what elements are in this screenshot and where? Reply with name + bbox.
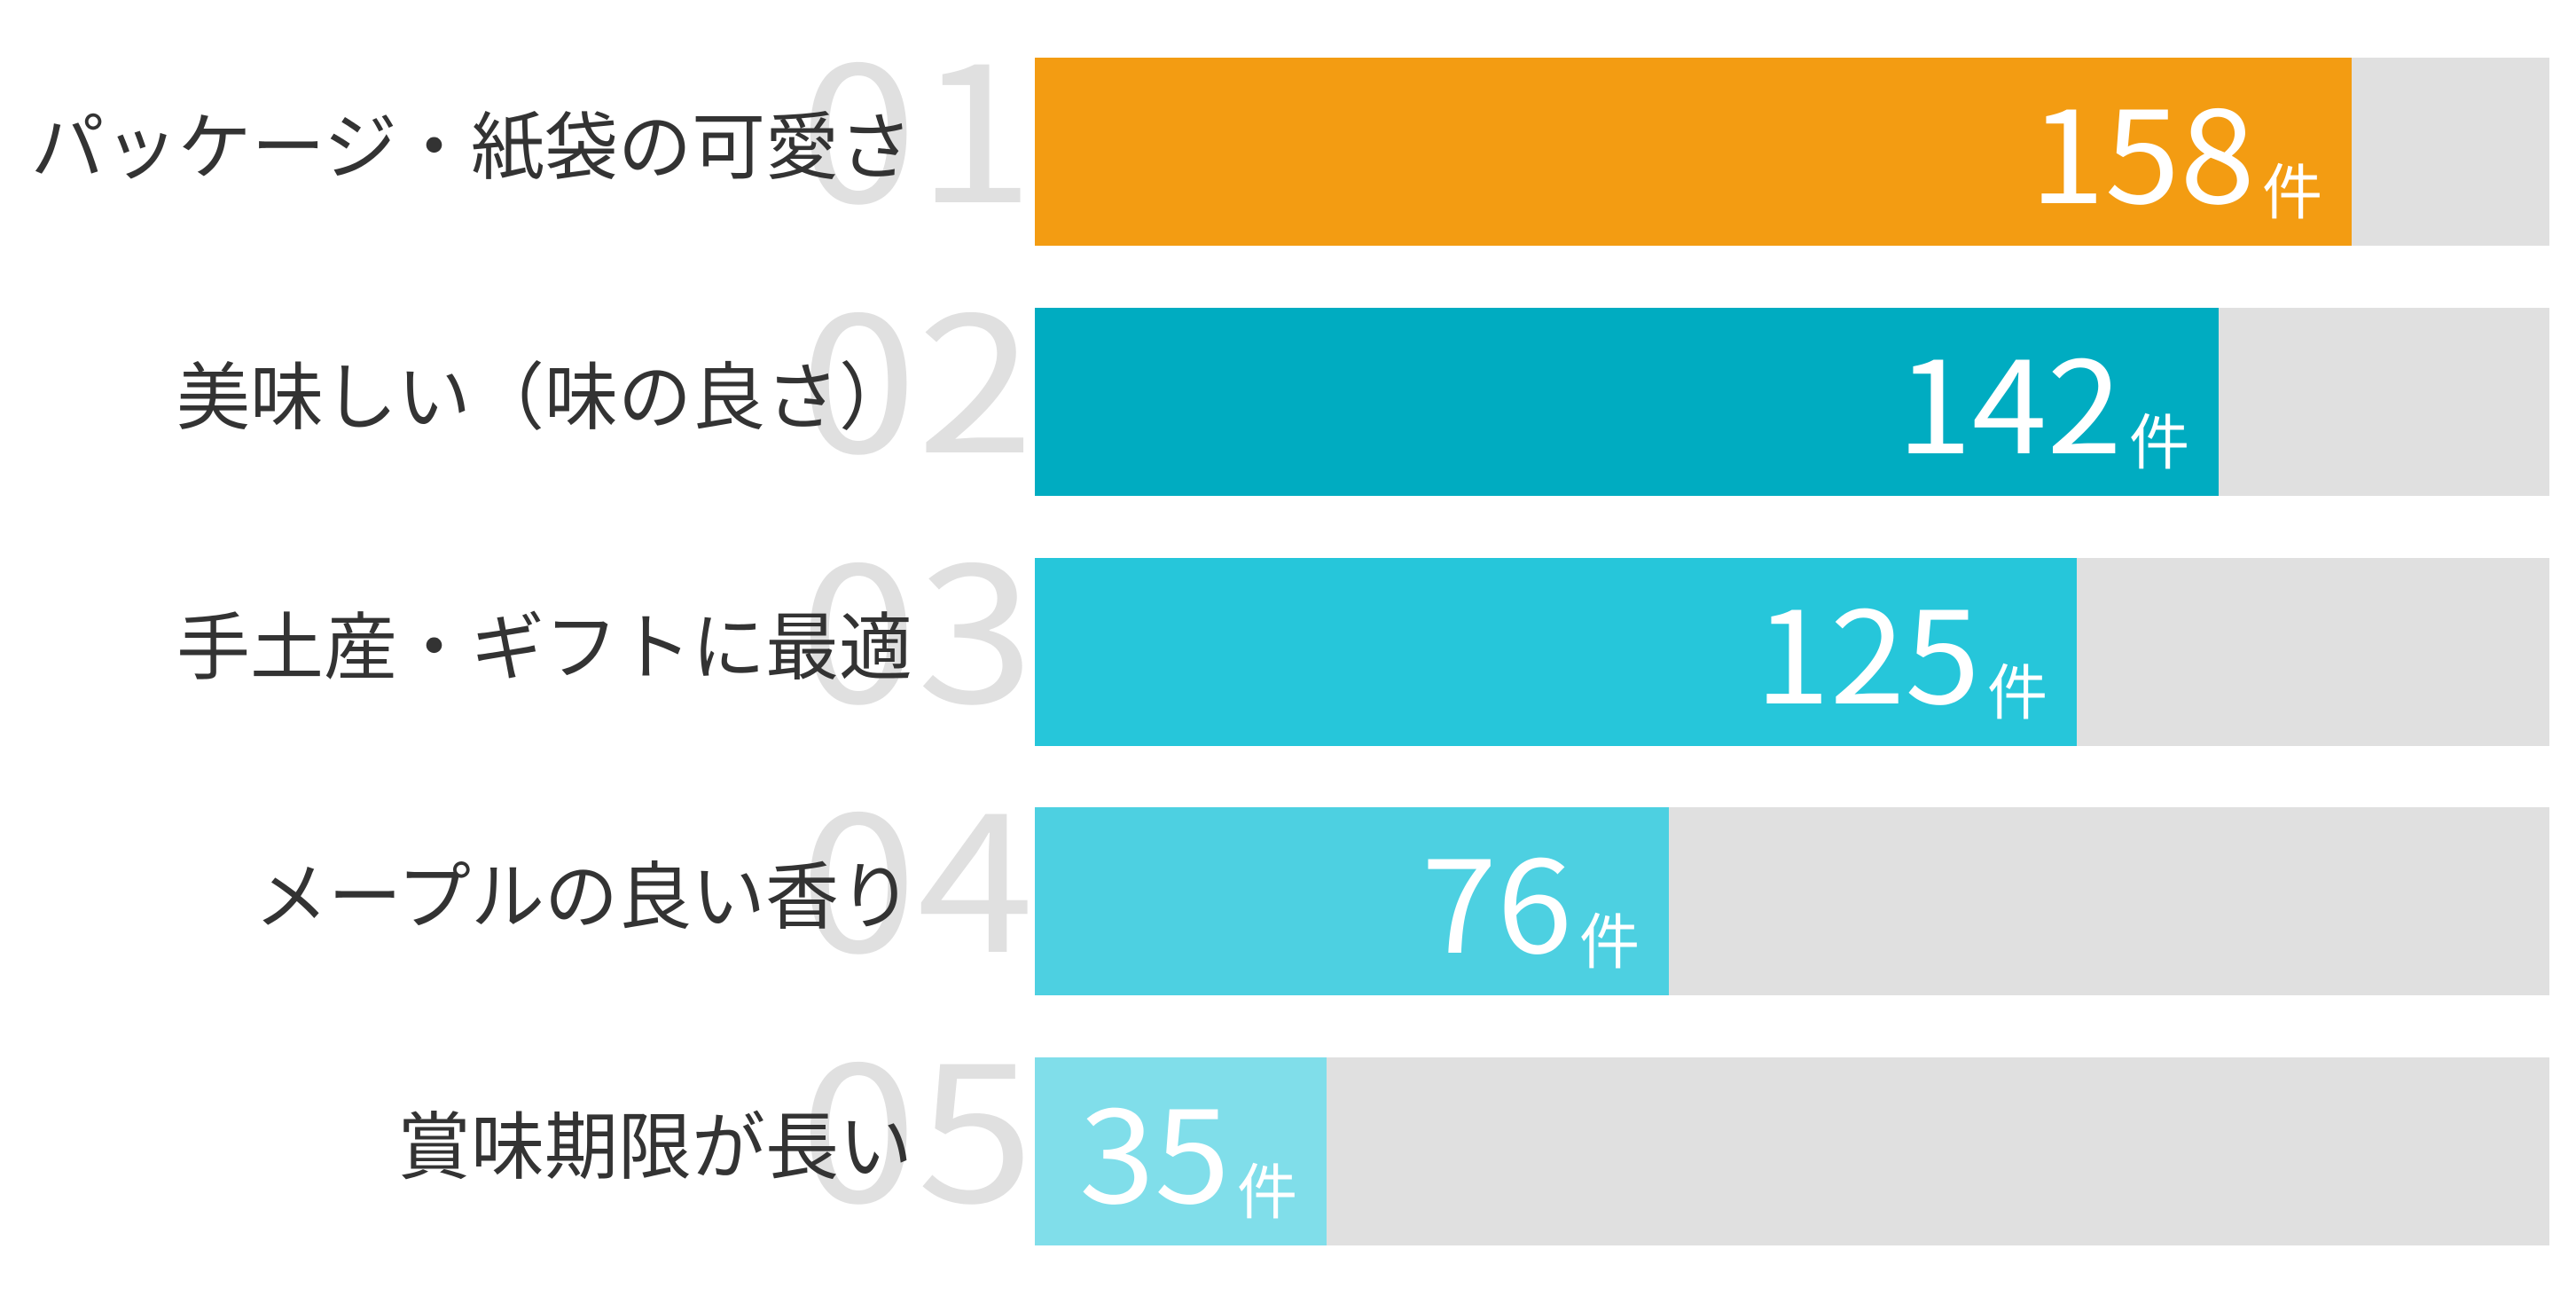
value 35: 35	[1079, 1056, 1230, 1240]
label: 賞味期限が長い	[397, 1106, 912, 1189]
unit: 件	[1579, 893, 1640, 981]
row 4: aroma	[254, 734, 2549, 1007]
label: 手土産・ギフトに最適	[176, 607, 912, 689]
bar track	[1035, 558, 2549, 746]
bar track	[1035, 807, 2549, 995]
bar value 35	[1035, 1057, 1327, 1245]
unit: 件	[1987, 644, 2047, 732]
bar track	[1035, 1057, 2549, 1245]
label: メープルの良い香り	[254, 856, 912, 939]
rank number 04: 04	[800, 734, 1034, 1007]
rank number 02: 02	[800, 235, 1034, 507]
row 2: taste	[176, 235, 2549, 507]
bar track	[1035, 58, 2549, 246]
row 5: shelf life	[397, 985, 2549, 1257]
bar value 158	[1035, 58, 2352, 246]
rank number 05: 05	[800, 985, 1034, 1257]
row 1: packaging	[31, 0, 2549, 257]
unit: 件	[2262, 144, 2322, 232]
row 3: souvenir	[176, 485, 2549, 758]
value 76: 76	[1421, 805, 1572, 990]
label: 美味しい（味の良さ）	[176, 357, 912, 439]
bar track	[1035, 308, 2549, 496]
value 125: 125	[1755, 556, 1980, 741]
bar value 125	[1035, 558, 2077, 746]
unit: 件	[1237, 1143, 1297, 1231]
bar value 76	[1035, 807, 1669, 995]
unit: 件	[2129, 394, 2189, 482]
value 158: 158	[2030, 56, 2255, 240]
rank number 03: 03	[800, 485, 1034, 758]
label: パッケージ・紙袋の可愛さ	[31, 106, 912, 189]
bar value 142	[1035, 308, 2219, 496]
value 142: 142	[1897, 306, 2122, 491]
